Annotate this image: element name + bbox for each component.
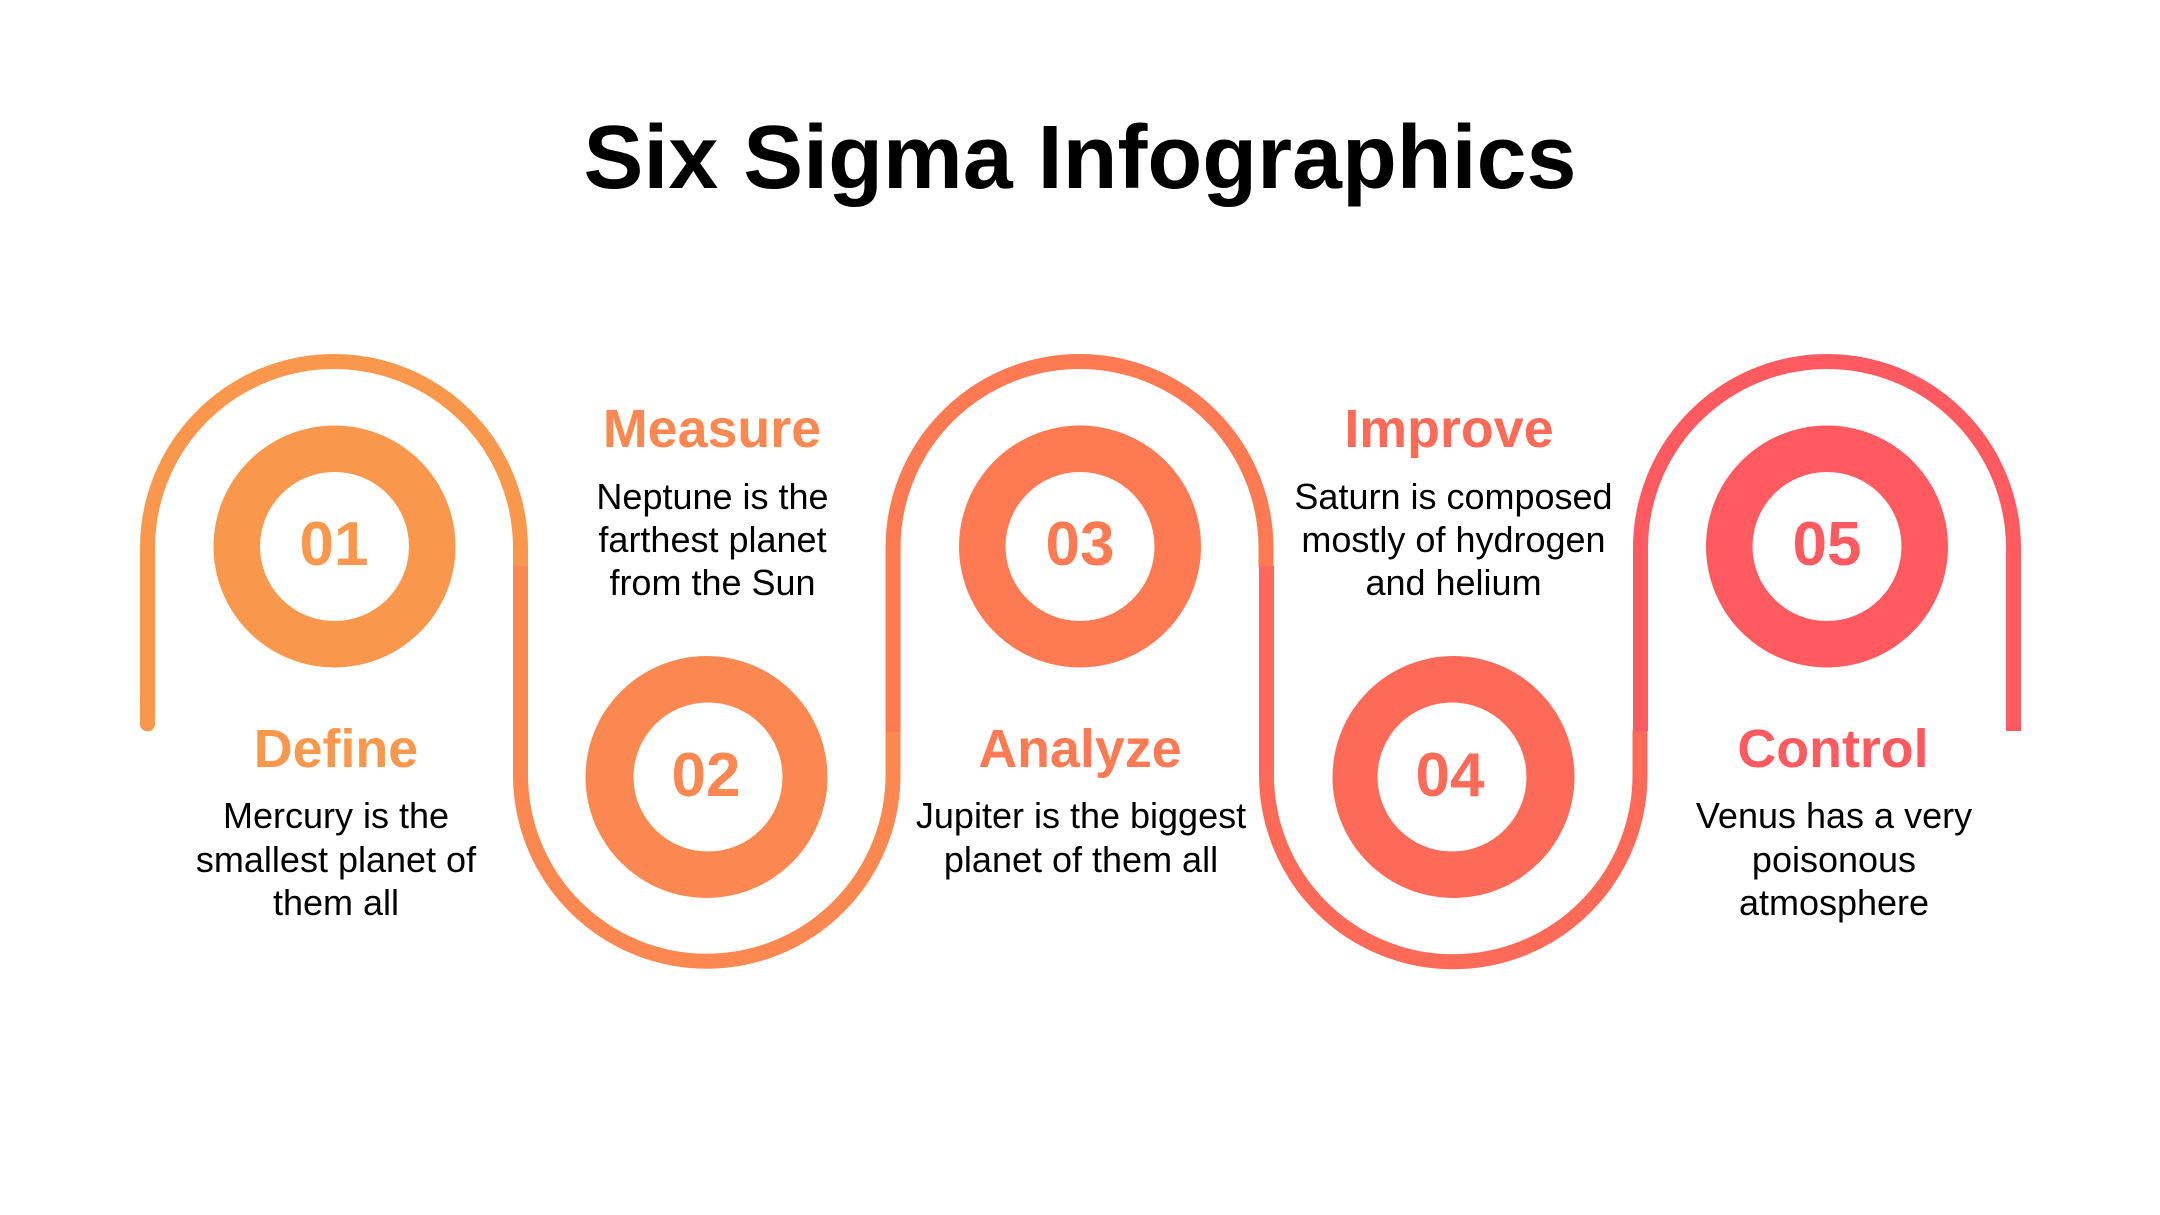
description: Improve: mostly of hydrogen [1301, 519, 1606, 560]
description: Improve: Saturn is composed [1294, 476, 1613, 517]
ring 03 [959, 426, 1201, 668]
description: Measure: from the Sun [609, 562, 816, 603]
path segment 2 [520, 566, 893, 961]
path segment 5 [1640, 362, 2014, 731]
description: Define: Mercury is the [223, 795, 449, 836]
step 01: Define [196, 426, 477, 923]
heading: Control: Control [1737, 719, 1929, 779]
heading: Analyze: Analyze [978, 719, 1182, 779]
ring 04 [1332, 656, 1574, 898]
path segment 1 [148, 362, 520, 724]
step 05: Control [1696, 426, 1972, 923]
description: Control: atmosphere [1739, 882, 1929, 923]
path segment 4 [1266, 566, 1640, 962]
heading: Define: Define [254, 719, 418, 779]
number 04: 04 [1416, 741, 1485, 810]
step 04: Improve [1294, 399, 1613, 898]
description: Control: Venus has a very [1696, 795, 1972, 836]
serpentine path connecting the five steps [148, 362, 2014, 962]
description: Analyze: planet of them all [944, 839, 1218, 880]
number 03: 03 [1046, 510, 1114, 579]
description: Control: poisonous [1752, 839, 1916, 880]
path segment 3 [893, 362, 1266, 732]
description: Define: smallest planet of [196, 839, 477, 880]
description: Analyze: Jupiter is the biggest [916, 795, 1246, 836]
heading: Improve: Improve [1344, 399, 1554, 459]
number 05: 05 [1793, 510, 1861, 579]
description: Measure: farthest planet [598, 519, 827, 560]
title: Six Sigma Infographics [584, 108, 1576, 208]
description: Define: them all [273, 882, 399, 923]
description: Improve: and helium [1365, 562, 1542, 603]
ring 02 [586, 656, 828, 898]
number 02: 02 [672, 741, 740, 810]
step 02: Measure [586, 399, 829, 898]
number 01: 01 [300, 510, 368, 579]
heading: Measure: Measure [603, 399, 821, 459]
ring 01 [214, 426, 456, 668]
step 03: Analyze [916, 426, 1246, 880]
description: Measure: Neptune is the [596, 476, 829, 517]
ring 05 [1706, 426, 1948, 668]
